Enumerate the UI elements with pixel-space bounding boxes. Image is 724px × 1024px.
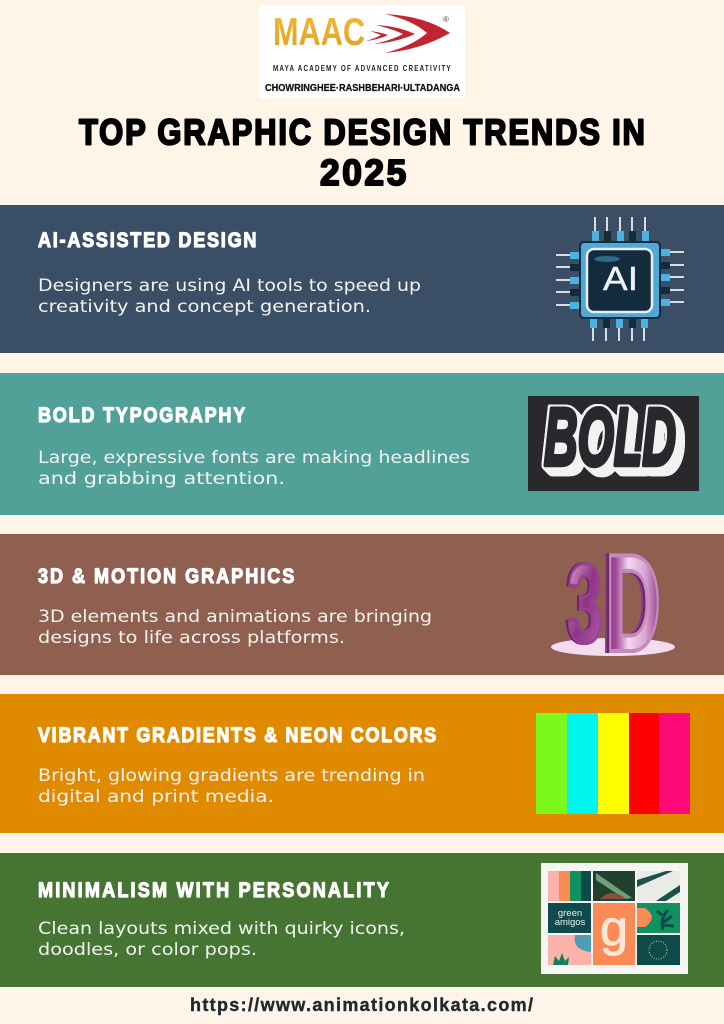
panel: bold typography [0, 373, 724, 515]
description [38, 276, 421, 317]
logo wordmark: MAAC [273, 11, 365, 54]
title [79, 113, 645, 193]
icon: branding collage: green [558, 908, 582, 919]
panel: minimalism with personality [0, 853, 724, 987]
description: and grabbing attention. [38, 469, 285, 489]
heading: MINIMALISM WITH PERSONALITY [38, 879, 389, 902]
logo subtitle: MAYA ACADEMY OF ADVANCED CREATIVITY [273, 65, 451, 73]
description: Large, expressive fonts are making headlines [38, 448, 470, 468]
description [38, 919, 405, 960]
logo arrows [366, 14, 450, 53]
icon: branding collage: g [600, 900, 628, 956]
panel: 3D and motion graphics [0, 526, 724, 681]
description: 3D elements and animations are bringing [38, 607, 432, 627]
description: doodles, or color pops. [38, 940, 257, 960]
description: Designers are using AI tools to speed up [38, 276, 421, 296]
logo registered mark: ® [443, 15, 449, 24]
description [38, 607, 432, 648]
description: Bright, glowing gradients are trending in [38, 766, 425, 786]
logo: MAAC [259, 5, 465, 98]
icon: branding collage [541, 863, 688, 974]
panel: vibrant gradients and neon colors [0, 694, 724, 833]
description: Clean layouts mixed with quirky icons, [38, 919, 405, 939]
heading: 3D & MOTION GRAPHICS [38, 565, 294, 588]
description [38, 766, 425, 807]
description: designs to life across platforms. [38, 628, 345, 648]
icon: 3D letters: 3 [567, 541, 603, 666]
description: digital and print media. [38, 787, 274, 807]
icon: branding collage: amigos [555, 917, 586, 928]
description [38, 448, 470, 489]
icon: AI chip [556, 217, 684, 341]
description: creativity and concept generation. [38, 297, 371, 317]
footer URL: https://www.animationkolkata.com/ [190, 995, 533, 1015]
heading: AI-ASSISTED DESIGN [38, 229, 256, 252]
icon: 3D letters [551, 526, 675, 681]
title: TOP GRAPHIC DESIGN TRENDS IN [79, 113, 645, 153]
icon: 3D letters: D [605, 526, 661, 681]
heading: BOLD TYPOGRAPHY [38, 404, 245, 427]
heading: VIBRANT GRADIENTS & NEON COLORS [38, 724, 436, 747]
icon: neon colour stripes [536, 713, 690, 814]
panel: AI-assisted design [0, 205, 724, 353]
title: 2025 [320, 153, 406, 193]
icon: AI chip: AI [603, 260, 638, 297]
logo locations: CHOWRINGHEE·RASHBEHARI·ULTADANGA [265, 83, 460, 94]
